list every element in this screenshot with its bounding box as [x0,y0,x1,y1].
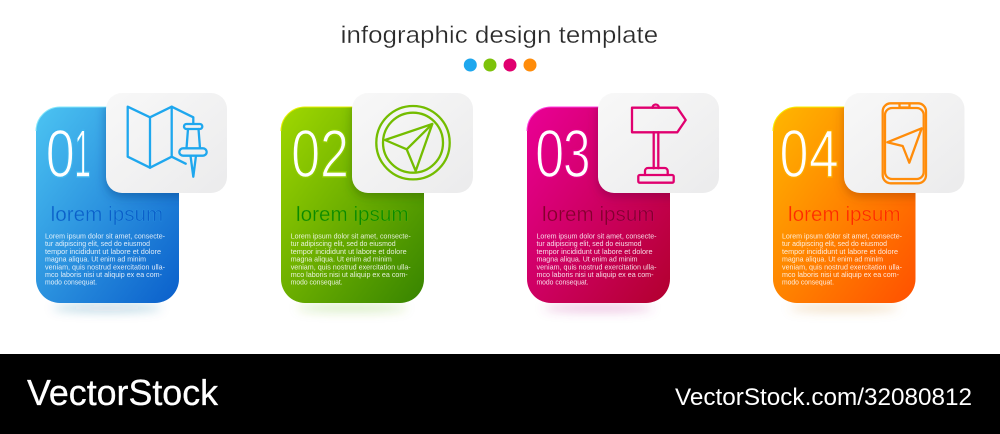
body text: mco laboris nisi ut aliquip ex ea com- [536,270,654,279]
body text: veniam, quis nostrud exercitation ulla- [782,262,903,271]
number 03: 0 [535,116,564,192]
number 01: 0 [46,116,75,192]
body text: mco laboris nisi ut aliquip ex ea com- [45,270,163,279]
tile shadow on card [100,107,179,201]
number 02: 2 [320,116,349,192]
body text: tur adipiscing elit, sed do eiusmod [291,239,396,248]
body text: mco laboris nisi ut aliquip ex ea com- [782,270,900,279]
title: infographic design template [341,22,658,49]
heading: lorem ipsum [788,204,901,226]
legend dots [464,58,536,72]
body text: veniam, quis nostrud exercitation ulla- [536,262,657,271]
icon tile [352,93,473,193]
body text [782,231,903,287]
panel: step 03 [527,93,719,312]
body text: tempor incididunt ut labore et dolore [291,247,407,256]
body text [45,231,166,287]
body text: veniam, quis nostrud exercitation ulla- [291,262,411,271]
body text: Lorem ipsum dolor sit amet, consecte- [291,231,411,240]
panel: step 01 [36,93,227,312]
body text [291,231,411,287]
number 02: 0 [291,116,320,192]
icon tile [598,93,719,193]
body text: tur adipiscing elit, sed do eiusmod [782,239,887,248]
icon: smartphone with navigation arrow [883,103,926,183]
icon: compass navigation arrow [376,106,450,179]
body text: modo consequat. [291,278,343,287]
body text: tempor incididunt ut labore et dolore [536,247,652,256]
heading: lorem ipsum [51,204,163,226]
body text: modo consequat. [536,278,588,287]
number 03 [535,116,590,192]
body text: magna aliqua. Ut enim ad minim [45,255,146,264]
panel: step 01: 1 [74,116,91,192]
body text: modo consequat. [45,278,97,287]
body text: Lorem ipsum dolor sit amet, consecte- [782,231,903,240]
number 04: 4 [809,116,839,192]
icon tile [844,93,964,193]
number 04 [780,116,839,192]
body text: modo consequat. [782,278,834,287]
body text: tur adipiscing elit, sed do eiusmod [536,239,642,248]
panel: step 04 [773,93,964,312]
body text [536,231,657,287]
number 02 [291,116,349,192]
panel: step 02 [281,93,473,312]
number 04: 0 [780,116,808,192]
body text: Lorem ipsum dolor sit amet, consecte- [536,231,657,240]
number 03: 3 [563,116,590,192]
heading: lorem ipsum [542,204,655,226]
footer bar [0,354,1000,434]
body text: magna aliqua. Ut enim ad minim [291,255,392,264]
tile shadow on card [594,107,670,201]
icon tile [106,93,227,193]
footer image id: VectorStock.com/32080812 [675,384,972,411]
body text: mco laboris nisi ut aliquip ex ea com- [291,270,408,279]
body text: magna aliqua. Ut enim ad minim [536,255,638,264]
body text: magna aliqua. Ut enim ad minim [782,255,883,264]
body text: Lorem ipsum dolor sit amet, consecte- [45,231,166,240]
footer logo: VectorStock [27,372,219,413]
tile shadow on card [840,107,916,201]
icon: signpost [632,104,686,183]
body text: veniam, quis nostrud exercitation ulla- [45,262,166,271]
body text: tempor incididunt ut labore et dolore [45,247,161,256]
heading: lorem ipsum [296,204,409,226]
icon: folded map with push pin [128,107,207,177]
body text: tempor incididunt ut labore et dolore [782,247,898,256]
tile shadow on card [345,107,424,200]
body text: tur adipiscing elit, sed do eiusmod [45,239,150,248]
